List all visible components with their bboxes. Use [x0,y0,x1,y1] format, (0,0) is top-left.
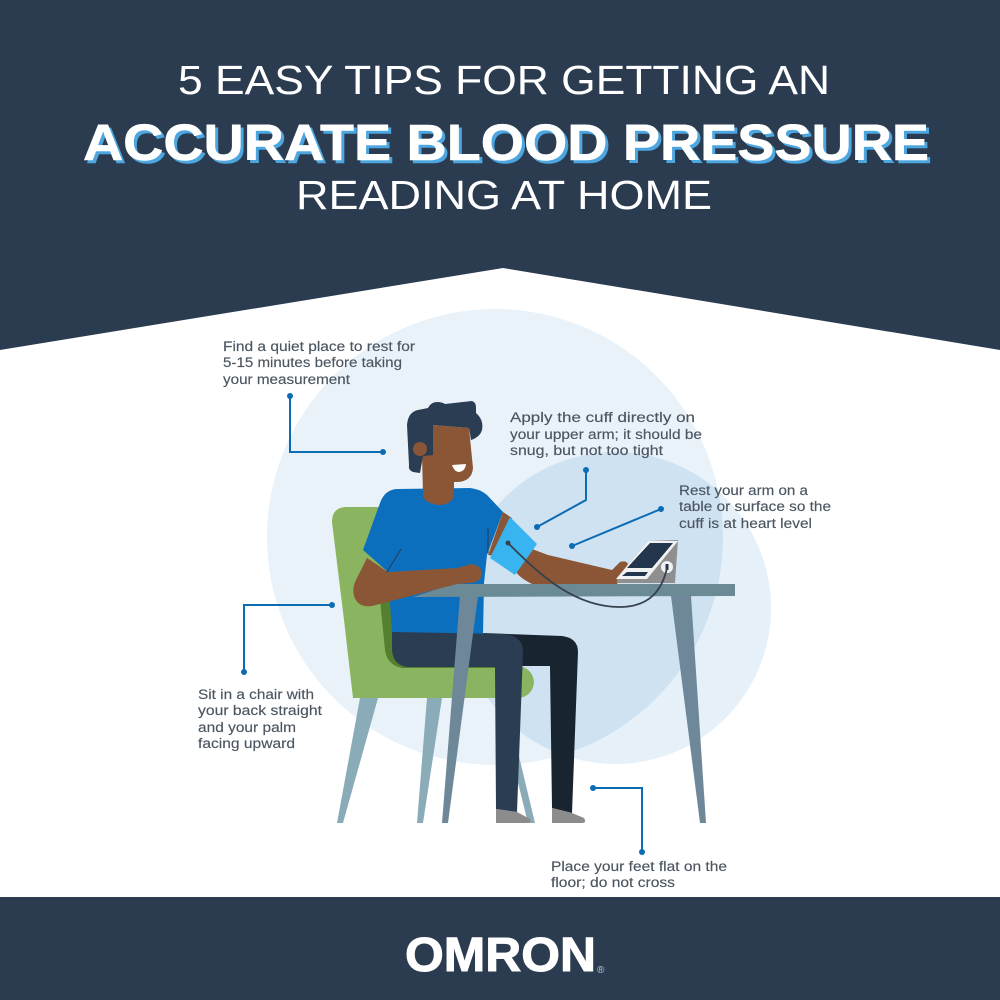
shoe: near [496,809,531,823]
callout: cuff [510,410,702,530]
chair inner shadow [380,600,495,668]
leader line [569,506,664,549]
title: ACCURATE BLOOD PRESSURE [83,114,929,171]
far upper arm [488,512,512,556]
text [198,687,322,751]
title: ACCURATE BLOOD PRESSURE [86,117,932,174]
text: Find a quiet place to rest for [223,339,416,354]
near leg [392,632,523,812]
callout: quiet place [223,339,416,455]
text: 5-15 minutes before taking [223,355,402,370]
footer band [0,897,1000,1000]
hair [407,401,482,473]
ear [413,442,427,456]
far leg [483,633,578,813]
chair [332,507,534,698]
header banner [0,0,1000,350]
leader line [241,602,335,675]
callout: arm on table [569,483,831,549]
title [83,57,932,218]
title: READING AT HOME [296,172,712,218]
leader line [534,467,589,530]
text [223,339,416,387]
near arm [353,558,482,606]
text: Sit in a chair with [198,687,314,702]
title: 5 EASY TIPS FOR GETTING AN [178,57,830,103]
table top [413,584,735,597]
chair legs [337,698,535,823]
cuff tube [508,543,667,607]
text: facing upward [198,736,295,751]
callout: chair posture [198,602,335,751]
background circles [267,309,771,765]
far forearm [516,549,628,584]
shirt [363,488,503,634]
text: table or surface so the [679,499,831,514]
shoe: far [552,808,585,823]
monitor [616,540,678,583]
shirt fold lines [387,528,488,572]
text [551,859,727,890]
text: floor; do not cross [551,875,675,890]
text: your upper arm; it should be [510,427,702,442]
text: and your palm [198,720,296,735]
text: your measurement [223,372,350,387]
table legs [442,596,706,823]
blood pressure cuff [490,517,537,575]
logo: OMRON: ® [597,965,605,976]
leader line [590,785,645,855]
logo: OMRON: OMRON [405,929,596,982]
illustration: person seated at table [332,401,735,823]
text: Place your feet flat on the [551,859,727,874]
text: Apply the cuff directly on [510,410,695,425]
leader line [287,393,386,455]
text: your back straight [198,703,322,718]
neck and face [422,425,473,505]
text [679,483,831,531]
text: cuff is at heart level [679,516,812,531]
text [510,410,702,458]
text: Rest your arm on a [679,483,809,498]
callout: feet [551,785,727,890]
smile [452,464,466,472]
text: snug, but not too tight [510,443,663,458]
